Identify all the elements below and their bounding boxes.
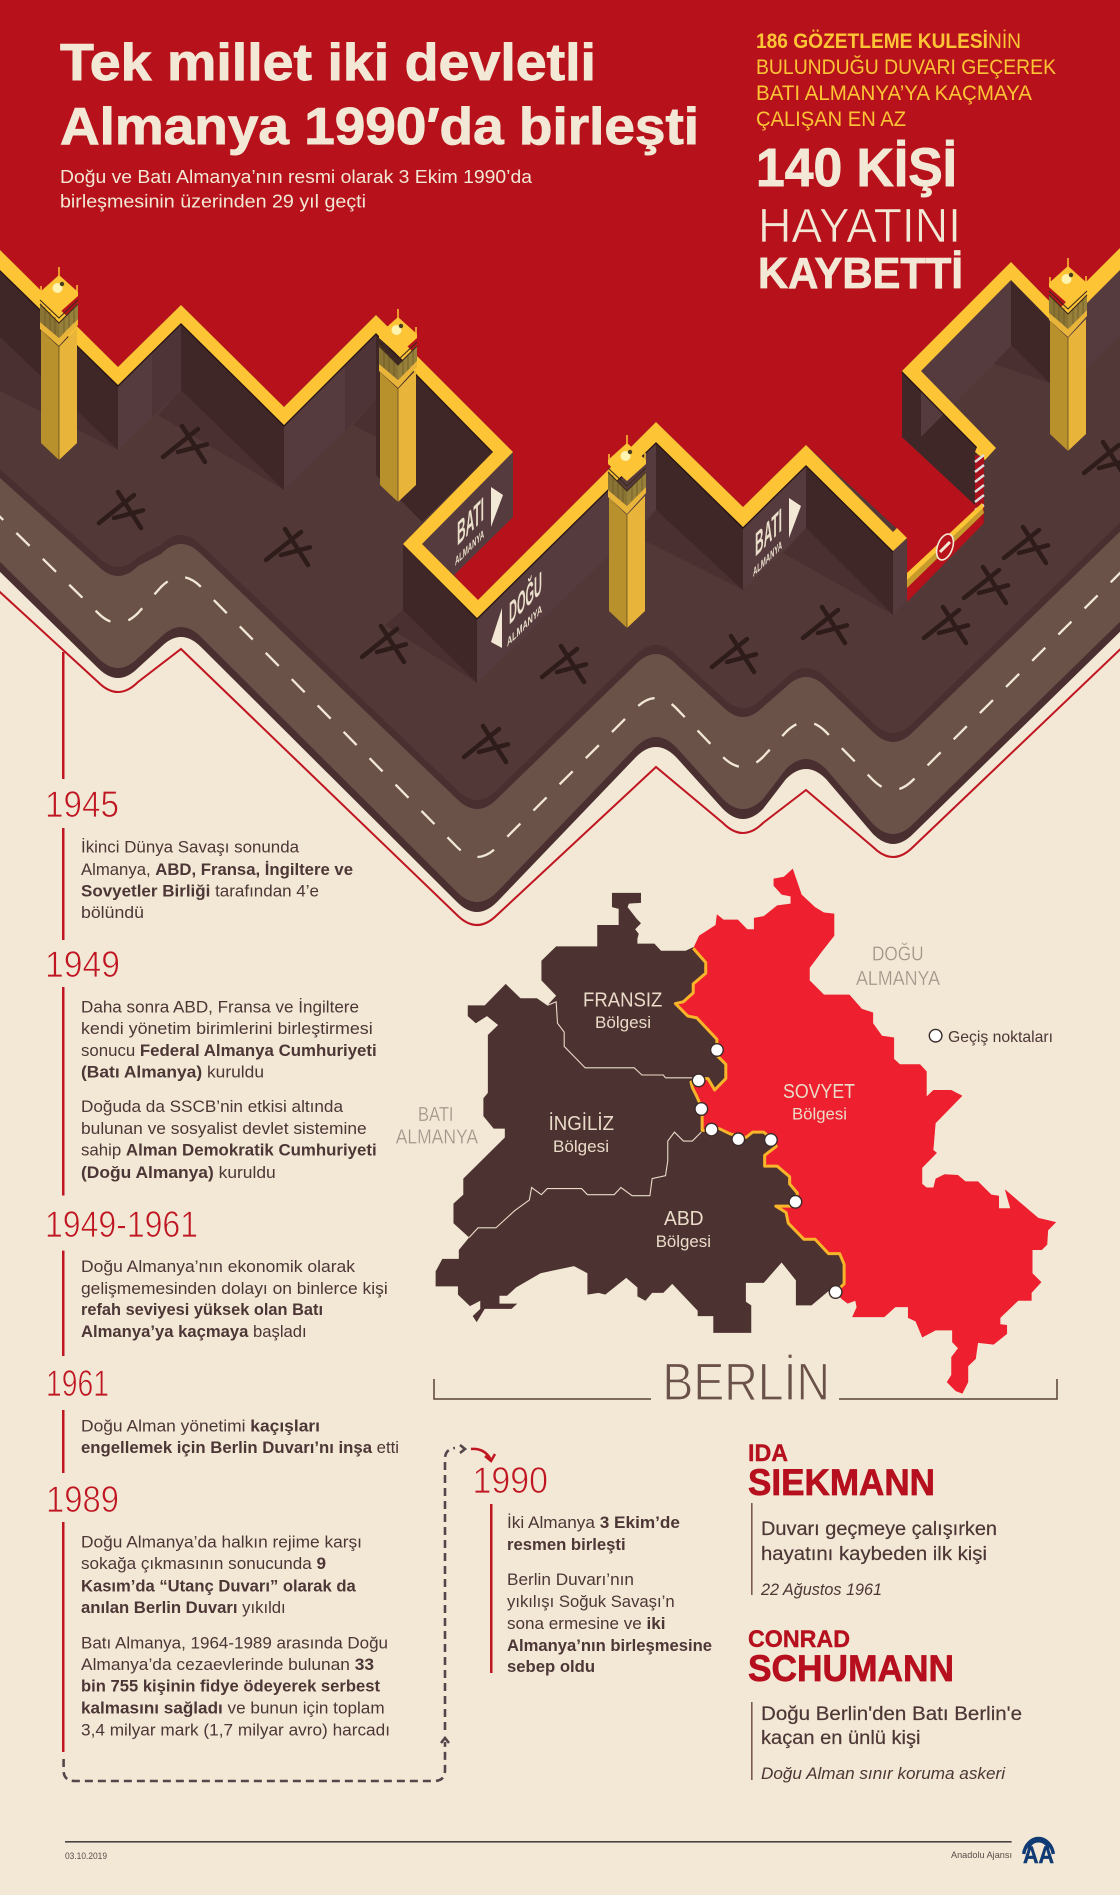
sector labels: Bölgesi [595,1013,651,1032]
map of divided Berlin [436,869,1056,1394]
sector labels: SOVYET [783,1081,855,1103]
profile: Conrad Schumann: Doğu Berlin'den Batı Berlin'e [761,1704,1022,1725]
timeline: 1949-1961: refah seviyesi yüksek olan Batı [81,1301,323,1319]
wall sign: BATI Almanya: BATI [457,489,484,553]
timeline: 1949-1961 [45,1204,388,1356]
wall sign: DOĞU Almanya: ALMANYA [507,602,542,650]
red arrow to 1990 [471,1449,495,1461]
callout: 140 victims: 140 KİŞİ [756,138,957,198]
timeline: 1990: sebep oldu [507,1658,595,1676]
timeline: 1949: kendi yönetim birimlerini birleştirmesi [81,1020,373,1038]
profile: Conrad Schumann: SCHUMANN [748,1648,954,1689]
timeline: 1949-1961: 1949-1961 [45,1204,198,1245]
callout: 140 victims: BATI ALMANYA’YA KAÇMAYA [756,82,1032,105]
timeline: 1961: Doğu Alman yönetimi kaçışları [81,1418,320,1436]
timeline: 1945: 1945 [45,784,119,825]
timeline: 1989: 3,4 milyar mark (1,7 milyar avro) harcadı [81,1721,390,1739]
profile: Conrad Schumann: CONRAD [748,1626,850,1653]
callout: 140 victims: 186 GÖZETLEME KULESİNİN [756,30,1021,53]
timeline: 1989: kalmasını sağladı ve bunun için toplam [81,1700,385,1718]
watch tower 2 [379,309,417,502]
timeline: 1949-1961: Doğu Almanya’nın ekonomik olarak [81,1258,356,1276]
subtitle: birleşmesinin üzerinden 29 yıl geçti [60,192,366,212]
sector labels: Bölgesi [792,1105,847,1124]
border gate [907,455,984,588]
sector lines [469,948,844,1292]
label: Doğu Almanya: DOĞU [872,943,924,966]
profile: Ida Siekmann: hayatını kaybeden ilk kişi [761,1544,987,1565]
timeline: 1961 [46,1363,399,1473]
timeline: 1990 [472,1460,712,1676]
subtitle: Doğu ve Batı Almanya’nın resmi olarak 3 Ekim 1990’da [60,167,533,187]
Berlin caption [434,1353,1057,1412]
timeline: 1989: Batı Almanya, 1964-1989 arasında Doğu [81,1634,388,1652]
timeline: 1961: 1961 [46,1363,109,1404]
profile: Conrad Schumann: kaçan en ünlü kişi [761,1728,920,1749]
wall sign: second BATI Almanya: BATI [755,500,782,564]
watch tower 3 [608,435,646,628]
timeline: 1989: Doğu Almanya’da halkın rejime karşı [81,1534,362,1552]
subtitle [60,167,533,212]
profile: Ida Siekmann [748,1440,997,1599]
road [0,0,1120,912]
label: Doğu Almanya: ALMANYA [856,968,941,990]
timeline: 1961: engellemek için Berlin Duvarı’nı inşa etti [81,1439,399,1457]
timeline: 1949: (Batı Almanya) kuruldu [81,1064,264,1082]
legend: crossing points: Geçiş noktaları [948,1029,1053,1046]
text: DOĞU [509,563,542,632]
timeline: 1989: anılan Berlin Duvarı yıkıldı [81,1599,286,1617]
timeline: 1990: Almanya’nın birleşmesine [507,1637,712,1655]
footer: Anadolu Ajansı [951,1850,1012,1861]
timeline: 1945 [45,652,353,940]
sector labels: İNGİLİZ [549,1112,614,1135]
logo: Anadolu Ajansı: AA [1023,1842,1054,1869]
timeline: 1990: İki Almanya 3 Ekim’de [507,1513,680,1532]
timeline: 1949: Daha sonra ABD, Fransa ve İngiltere [81,998,359,1017]
timeline: 1990: Berlin Duvarı’nın [507,1571,634,1589]
timeline: 1989: Kasım’da “Utanç Duvarı” olarak da [81,1577,357,1595]
timeline: 1949: sonucu Federal Almanya Cumhuriyeti [81,1042,377,1060]
timeline: 1949: Doğuda da SSCB’nin etkisi altında [81,1098,344,1116]
wall faces [0,268,1120,683]
timeline: 1945: Sovyetler Birliği tarafından 4’e [81,883,319,901]
red border line along the road [0,583,1120,925]
timeline: 1945: İkinci Dünya Savaşı sonunda [81,838,300,857]
timeline: 1949: sahip Alman Demokratik Cumhuriyeti [81,1142,377,1160]
timeline: 1949-1961: gelişmemesinden dolayı on binlerce kişi [81,1280,388,1298]
crossing points [692,1044,842,1298]
ground [0,0,1120,809]
timeline: 1949: bulunan ve sosyalist devlet sistemine [81,1120,367,1138]
label: Doğu Almanya [856,943,941,990]
label: Batı Almanya: BATI [418,1104,454,1126]
timeline: 1990: 1990 [472,1460,548,1501]
watch tower 1 [40,267,78,460]
timeline: 1949: (Doğu Almanya) kuruldu [81,1164,276,1182]
sector labels: Bölgesi [553,1137,609,1156]
title: Almanya 1990′da birleşti [60,98,699,156]
Soviet sector [675,869,1056,1394]
timeline: 1990: sona ermesine ve iki [507,1615,666,1633]
label: Batı Almanya: ALMANYA [396,1127,479,1149]
timeline: 1949 [45,944,377,1196]
timeline: 1989: 1989 [46,1479,119,1520]
callout: 140 victims: ÇALIŞAN EN AZ [756,108,906,131]
profile: Ida Siekmann: Duvarı geçmeye çalışırken [761,1519,997,1540]
wall sign: BATI Almanya: ALMANYA [455,527,484,569]
title [60,34,699,156]
footer: 03.10.2019 [65,1851,107,1861]
wall sign: DOĞU Almanya [491,563,542,650]
timeline: 1989 [46,1479,390,1752]
callout: 140 victims: BULUNDUĞU DUVARI GEÇEREK [756,56,1056,79]
callout: 140 victims: KAYBETTİ [758,249,963,298]
timeline: 1989: Almanya’da cezaevlerinde bulunan 33 [81,1656,374,1674]
timeline: 1989: sokağa çıkmasının sonucunda 9 [81,1555,326,1573]
sector labels: Bölgesi [656,1232,711,1251]
profile: Ida Siekmann: IDA [748,1440,788,1467]
watch tower 4 [1049,258,1087,451]
sector labels: ABD [664,1208,704,1230]
profile: Ida Siekmann: SIEKMANN [748,1462,935,1503]
profile: Ida Siekmann: 22 Ağustos 1961 [760,1580,882,1599]
profile: Conrad Schumann: Doğu Alman sınır koruma askeri [761,1764,1006,1783]
tank traps [99,426,1120,762]
timeline: 1949-1961: Almanya’ya kaçmaya başladı [81,1323,307,1341]
sector labels: FRANSIZ [583,989,662,1011]
sector labels [549,989,855,1251]
callout: 140 victims [756,30,1056,298]
timeline: 1990: yıkılışı Soğuk Savaşı’n [507,1593,675,1611]
timeline: 1989: bin 755 kişinin fidye ödeyerek serbest [81,1678,380,1696]
label: Batı Almanya [396,1104,479,1149]
red East side area [0,0,1120,602]
callout: 140 victims: HAYATINI [758,200,961,253]
timeline: 1949: 1949 [45,944,120,985]
West Berlin sectors [436,893,844,1333]
dashed arrow from 1989 to 1990 [64,1445,465,1781]
title: Tek millet iki devletli [60,34,596,92]
wall sign: second BATI Almanya: ALMANYA [753,538,782,580]
timeline: 1990: resmen birleşti [507,1536,626,1554]
timeline: 1945: Almanya, ABD, Fransa, İngiltere ve [81,861,353,879]
profile: Conrad Schumann [748,1626,1022,1783]
footer [65,1841,1012,1861]
wall top [0,246,1120,619]
Berlin caption: BERLİN [662,1353,830,1412]
timeline: 1945: bölündü [81,904,144,922]
